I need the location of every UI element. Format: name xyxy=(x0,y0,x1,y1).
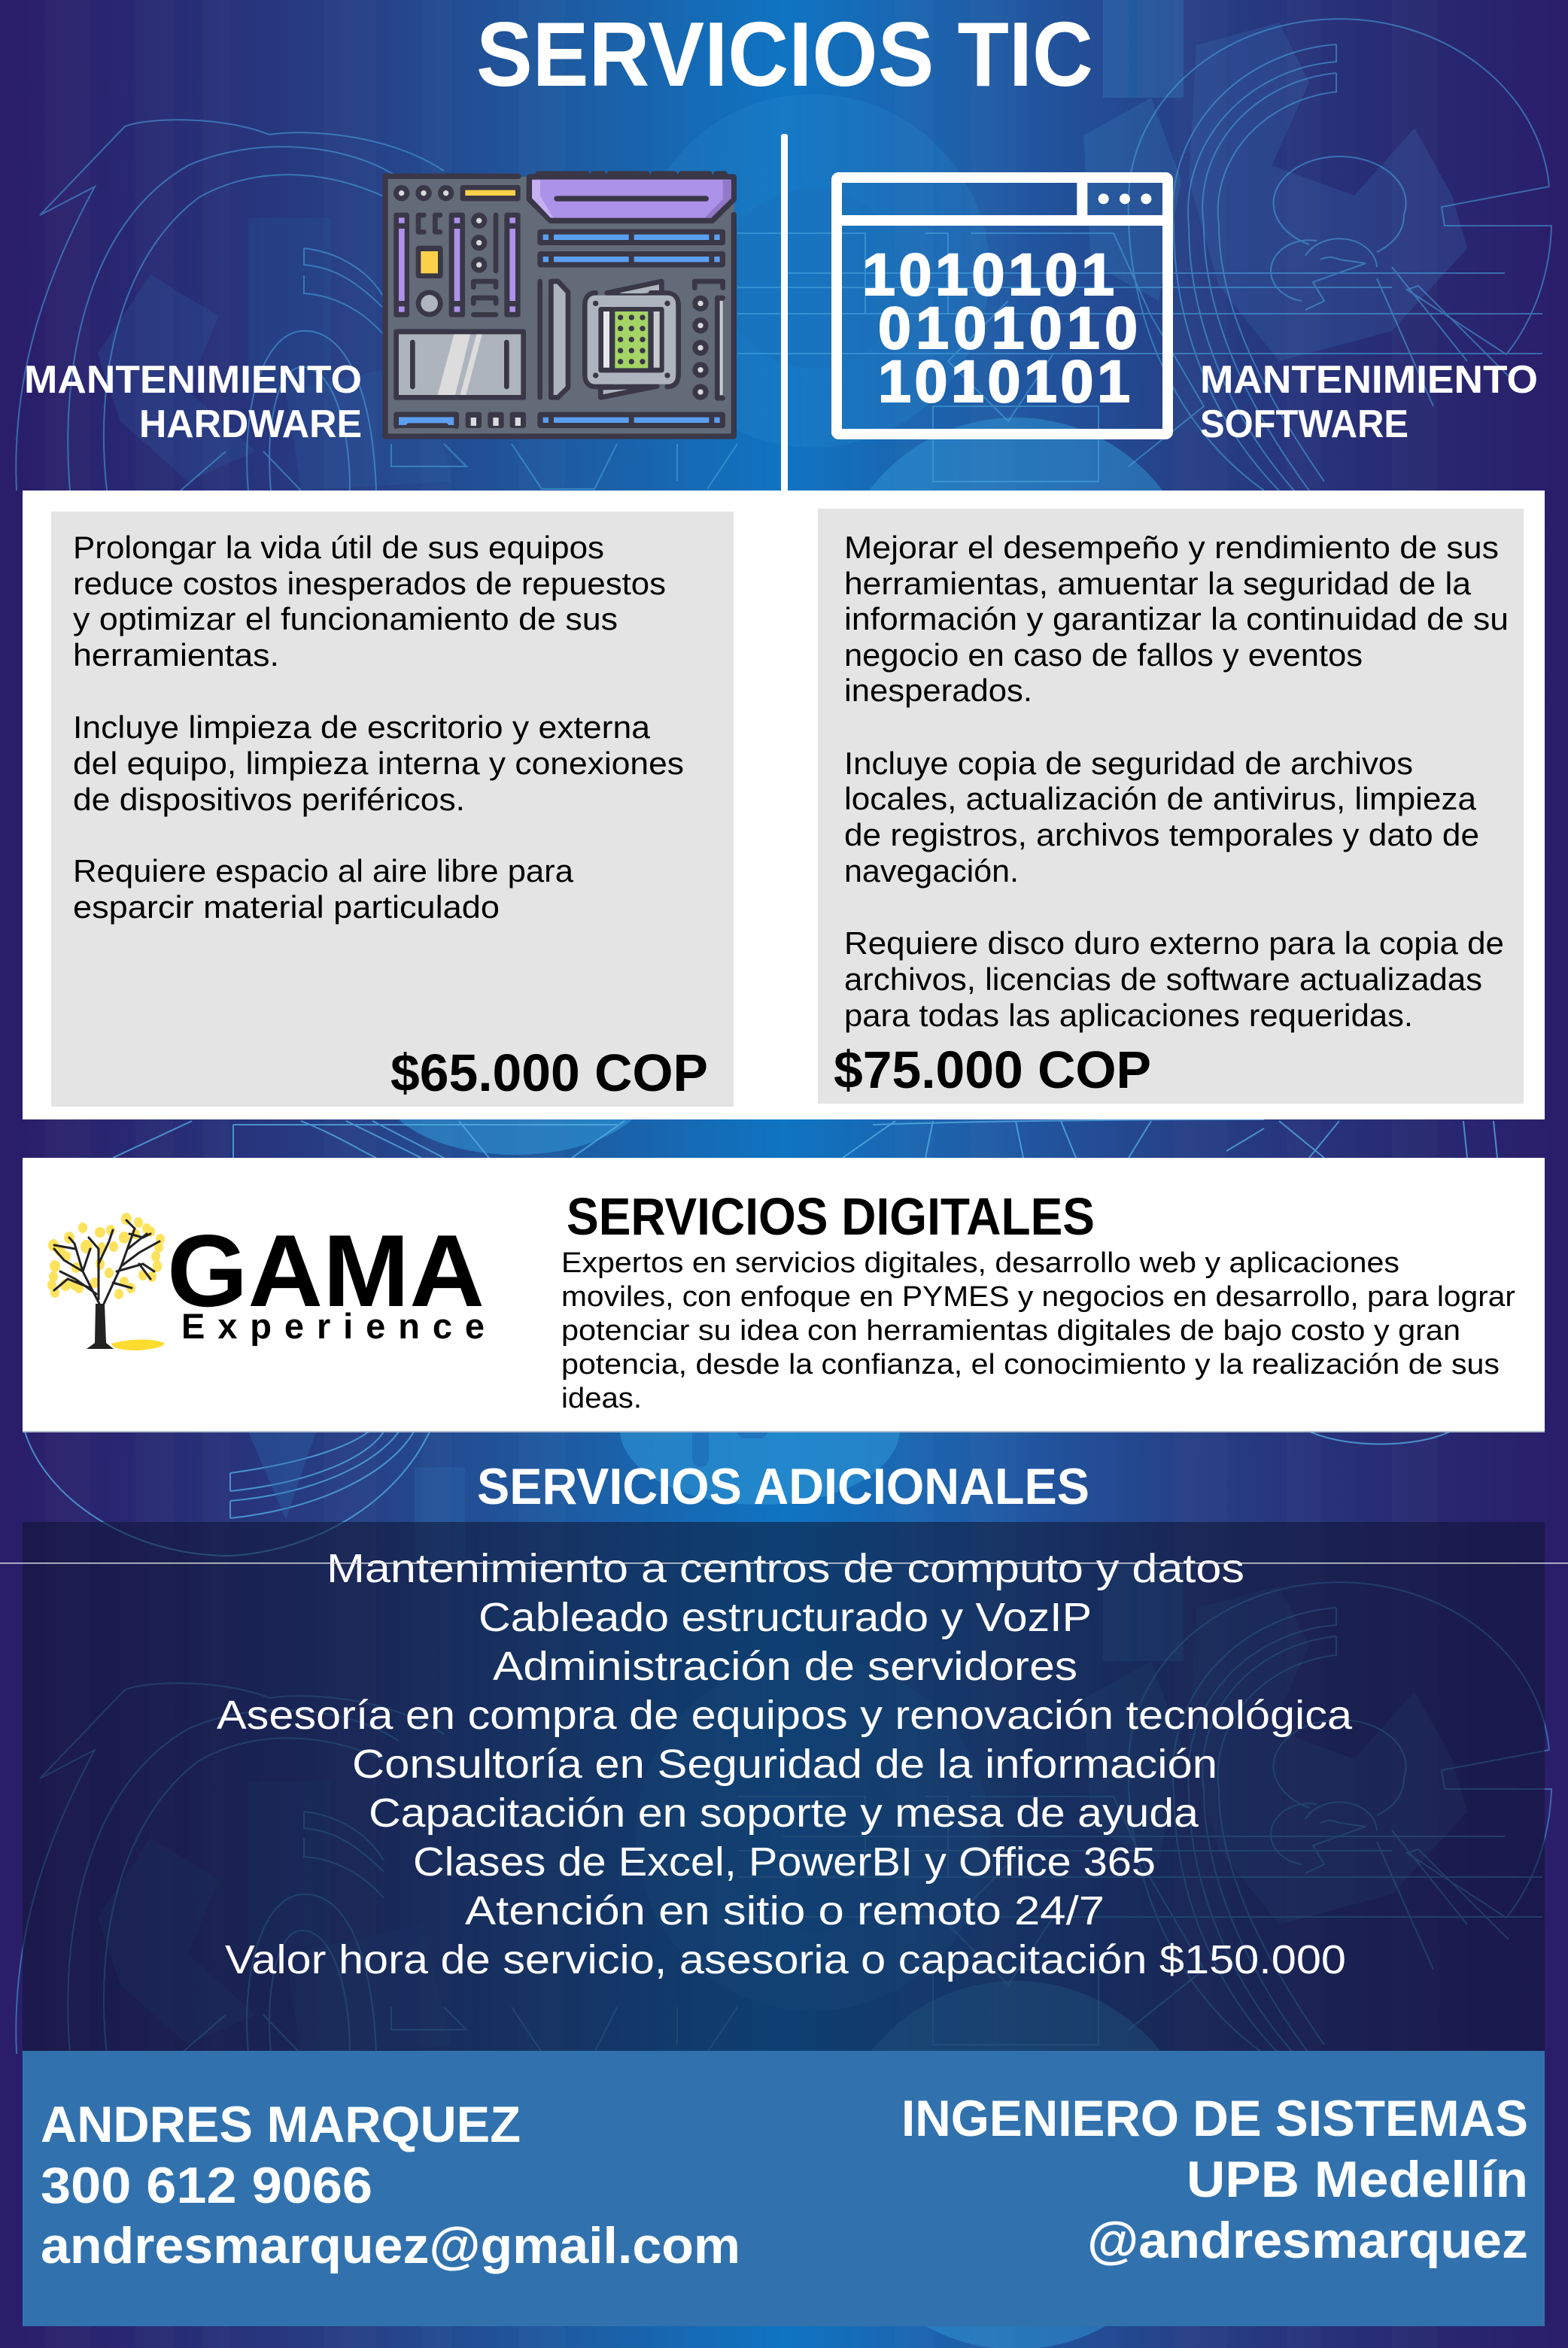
services list: Asesoría en compra de equipos y renovación tecnológica xyxy=(217,1693,1353,1738)
contact details: andresmarquez@gmail.com xyxy=(41,2217,740,2274)
services list: Valor hora de servicio, asesoria o capacitación $150.000 xyxy=(225,1937,1346,1982)
digital description: potencia, desde la confianza, el conocimiento y la realización de sus xyxy=(561,1349,1500,1381)
hardware description: esparcir material particulado xyxy=(73,889,500,925)
icon: binary window: 1010101 xyxy=(862,241,1114,308)
services list: Atención en sitio o remoto 24/7 xyxy=(465,1888,1105,1933)
icon: binary window: 1010101 xyxy=(878,348,1130,415)
label: mantenimiento hardware: MANTENIMIENTO xyxy=(24,358,362,402)
professional details: @andresmarquez xyxy=(1087,2212,1528,2269)
hardware description: de dispositivos periféricos. xyxy=(73,782,465,817)
software description: archivos, licencias de software actualizadas xyxy=(844,961,1482,997)
hardware description: reduce costos inesperados de repuestos xyxy=(73,566,666,601)
software description: de registros, archivos temporales y dato de xyxy=(844,817,1479,852)
professional details: UPB Medellín xyxy=(1187,2151,1528,2208)
software description: para todas las aplicaciones requeridas. xyxy=(844,998,1413,1033)
contact details: 300 612 9066 xyxy=(41,2157,372,2214)
software description: Requiere disco duro externo para la copia de xyxy=(844,925,1504,961)
hardware description: y optimizar el funcionamiento de sus xyxy=(73,601,618,636)
label: mantenimiento software: MANTENIMIENTO xyxy=(1200,358,1538,402)
center divider xyxy=(781,134,788,492)
icon: yellow tree xyxy=(47,1213,165,1350)
hardware description: Prolongar la vida útil de sus equipos xyxy=(73,530,604,565)
software price: $75.000 COP xyxy=(834,1040,1151,1099)
services list: Mantenimiento a centros de computo y datos xyxy=(327,1546,1244,1591)
software description: Mejorar el desempeño y rendimiento de sus xyxy=(844,530,1499,565)
hardware description: del equipo, limpieza interna y conexiones xyxy=(73,746,684,781)
icon: binary window: 0101010 xyxy=(878,294,1138,361)
software description: información y garantizar la continuidad de su xyxy=(844,601,1509,636)
heading: servicios adicionales: SERVICIOS ADICIONALES xyxy=(477,1458,1089,1515)
contact details xyxy=(41,2096,740,2274)
logo: gama experience: Experience xyxy=(181,1306,485,1346)
title: SERVICIOS TIC xyxy=(476,3,1093,105)
software description xyxy=(844,530,1509,1033)
panel: servicios adicionales xyxy=(23,1522,1545,2052)
software description: negocio en caso de fallos y eventos xyxy=(844,637,1363,673)
digital description xyxy=(561,1247,1515,1414)
hardware description: herramientas. xyxy=(73,637,279,673)
panel: contact footer xyxy=(23,2051,1545,2326)
label: mantenimiento hardware xyxy=(24,358,362,446)
icon: motherboard xyxy=(385,174,734,436)
services list: Clases de Excel, PowerBI y Office 365 xyxy=(413,1839,1156,1885)
label: mantenimiento software: SOFTWARE xyxy=(1200,402,1408,446)
panel: servicios digitales xyxy=(23,1158,1545,1432)
digital description: potenciar su idea con herramientas digitales de bajo costo y gran xyxy=(561,1315,1460,1347)
hardware description xyxy=(73,530,684,925)
label: mantenimiento software xyxy=(1200,358,1538,446)
logo: gama experience xyxy=(47,1213,485,1350)
services list: Capacitación en soporte y mesa de ayuda xyxy=(369,1791,1199,1836)
services list: Cableado estructurado y VozIP xyxy=(479,1595,1092,1640)
hardware description: Requiere espacio al aire libre para xyxy=(73,853,574,888)
hardware description: Incluye limpieza de escritorio y externa xyxy=(73,709,651,745)
services list: Consultoría en Seguridad de la información xyxy=(352,1742,1217,1787)
software description: inesperados. xyxy=(844,673,1032,708)
contact details: ANDRES MARQUEZ xyxy=(41,2096,521,2153)
digital description: Expertos en servicios digitales, desarrollo web y aplicaciones xyxy=(561,1247,1399,1279)
services list xyxy=(217,1546,1353,1982)
logo: gama experience: GAMA xyxy=(167,1213,485,1328)
icon: binary window xyxy=(837,178,1168,434)
panel: maintenance cards xyxy=(23,491,1545,1119)
label: mantenimiento hardware: HARDWARE xyxy=(139,402,362,446)
digital description: moviles, con enfoque en PYMES y negocios en desarrollo, para lograr xyxy=(561,1281,1515,1313)
software description: Incluye copia de seguridad de archivos xyxy=(844,746,1413,781)
professional details: INGENIERO DE SISTEMAS xyxy=(901,2090,1528,2147)
software description: herramientas, amuentar la seguridad de la xyxy=(844,566,1472,601)
digital description: ideas. xyxy=(561,1383,642,1414)
software description: locales, actualización de antivirus, limpieza xyxy=(844,781,1477,816)
professional details xyxy=(901,2090,1528,2269)
digital heading: SERVICIOS DIGITALES xyxy=(567,1187,1095,1246)
hardware price: $65.000 COP xyxy=(390,1043,708,1102)
card: hardware xyxy=(51,512,734,1107)
software description: navegación. xyxy=(844,853,1019,888)
card: software xyxy=(818,509,1524,1104)
services list: Administración de servidores xyxy=(493,1644,1077,1689)
